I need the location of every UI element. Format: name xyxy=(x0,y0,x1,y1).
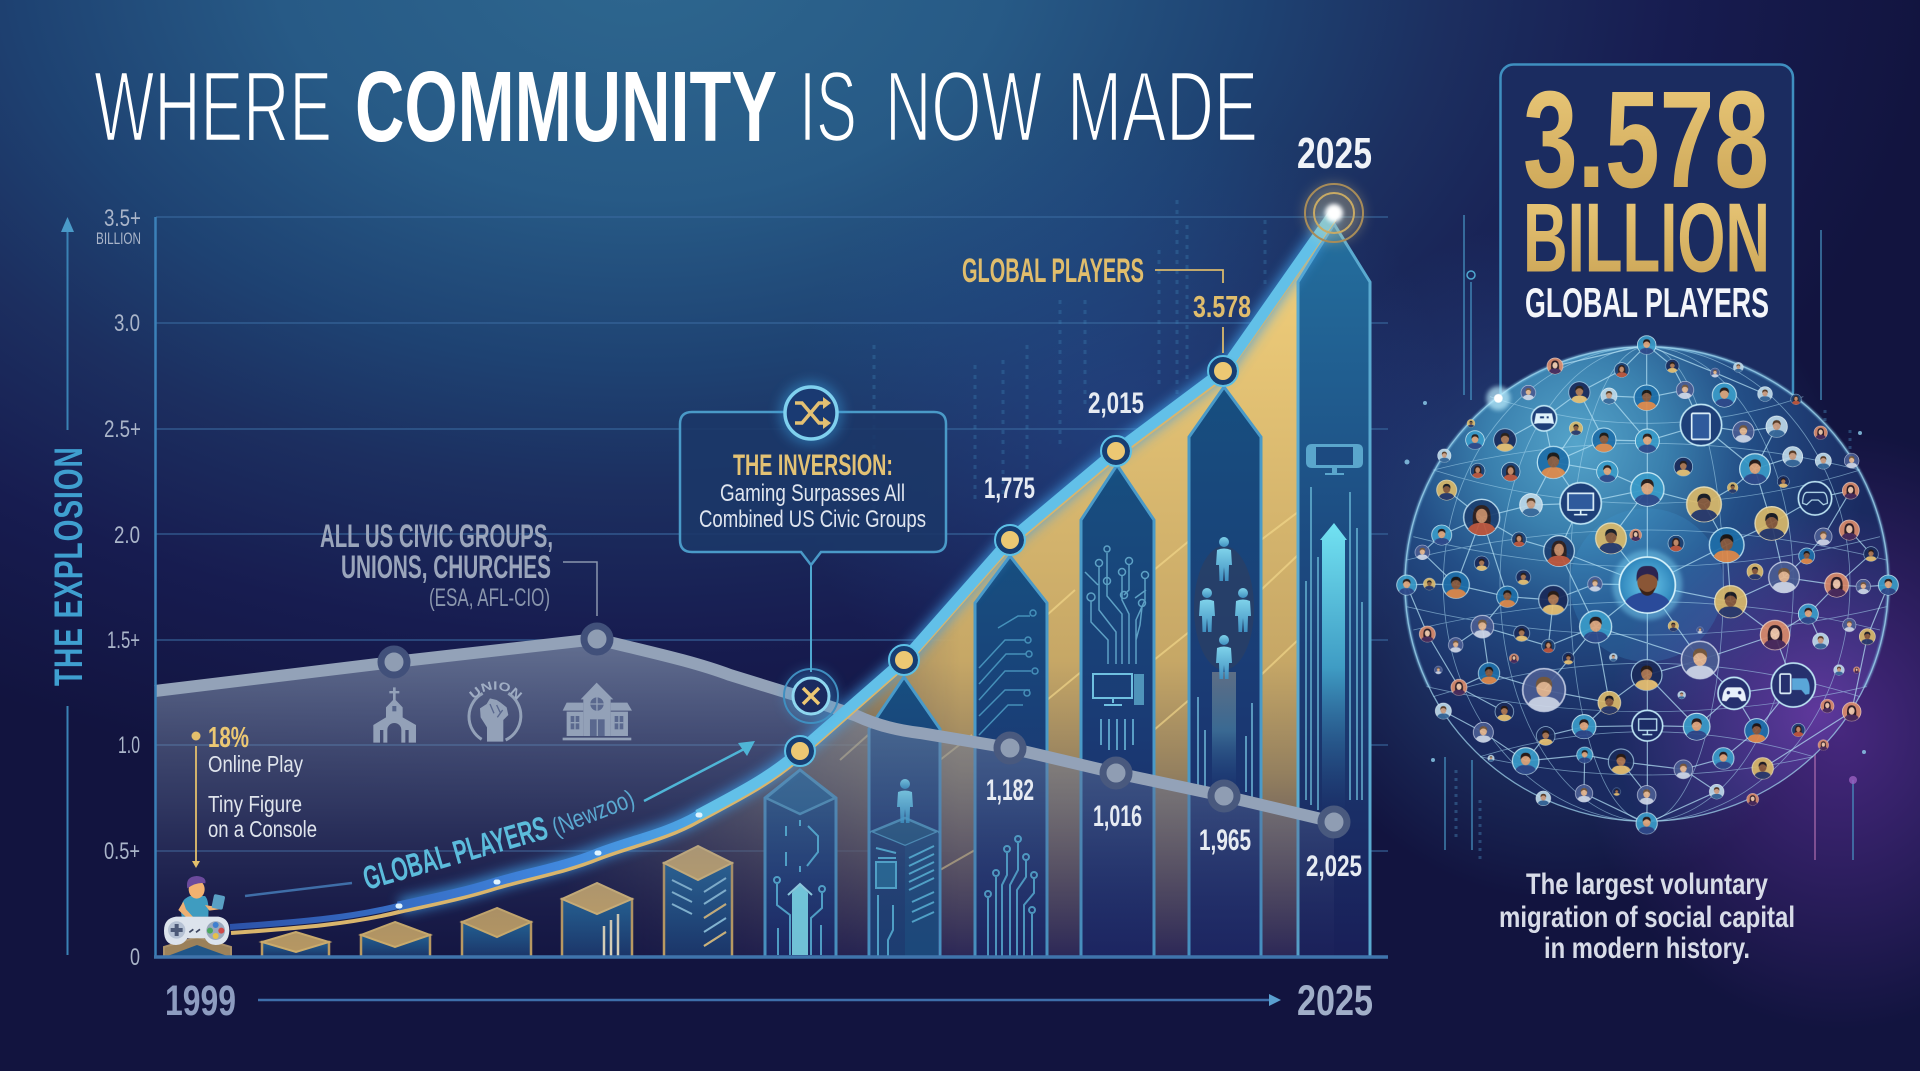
title: WHERE xyxy=(94,51,332,163)
global players gold label: GLOBAL PLAYERS xyxy=(962,252,1144,290)
bar 2017 xyxy=(1081,465,1154,957)
icon: union fist: UNION xyxy=(469,681,522,700)
value labels: 2,015 xyxy=(1088,387,1144,420)
bar 2025 rising arrow xyxy=(1320,523,1347,812)
globe wireframe xyxy=(1407,347,1887,821)
bar 2015 lower circuit xyxy=(985,836,1037,956)
bar 2025 handheld console icon xyxy=(1306,444,1363,475)
callout body: Gaming Surpasses All xyxy=(720,480,905,507)
value labels: 1,182 xyxy=(986,774,1034,807)
icon: tiny figure on a console xyxy=(164,876,229,945)
y axis labels: 3.5+ xyxy=(104,205,141,232)
bar 2003 xyxy=(361,922,430,957)
bar 2001 xyxy=(262,932,329,957)
central glow xyxy=(1612,550,1682,620)
data rain columns xyxy=(874,200,1265,520)
bar 2011 xyxy=(765,770,836,957)
y axis labels: 1.0 xyxy=(118,732,140,759)
y axis labels: 3.0 xyxy=(114,310,140,337)
value labels xyxy=(984,387,1362,883)
callout: the inversion xyxy=(680,381,946,672)
global players gold label: 3.578 xyxy=(1193,289,1251,324)
bar chart: growth columns xyxy=(164,224,1370,957)
online play note xyxy=(192,722,317,868)
icon: church xyxy=(373,687,416,743)
civic groups shaded area xyxy=(155,639,1334,957)
value labels: 1,965 xyxy=(1199,824,1251,857)
bar 2017 circuit xyxy=(1085,546,1148,664)
civic groups label: (ESA, AFL-CIO) xyxy=(429,584,550,612)
title: NOW xyxy=(885,51,1042,163)
closing statement xyxy=(1499,868,1795,965)
bar 2015 xyxy=(975,556,1047,957)
glint xyxy=(1486,386,1510,410)
callout body xyxy=(699,480,926,533)
online play note: Online Play xyxy=(208,751,303,777)
column illustrations xyxy=(774,444,1363,957)
bar 2020 xyxy=(1189,387,1261,957)
closing statement: migration of social capital xyxy=(1499,901,1795,934)
icon: gamepad badge xyxy=(1531,406,1557,431)
global players curve glow xyxy=(400,213,1334,906)
icon: monitor large xyxy=(1560,483,1601,524)
bar 2020 rising lines xyxy=(1198,697,1252,797)
bar 2025 light lines xyxy=(1306,487,1362,810)
bar 2013 person and tower xyxy=(876,779,934,957)
icon: phone and controller xyxy=(1771,663,1815,707)
global players line nodes xyxy=(788,360,1234,762)
value labels: 1,775 xyxy=(984,472,1035,505)
global players curve label: GLOBAL PLAYERS xyxy=(359,809,552,897)
gold area under global players curve xyxy=(618,242,1321,956)
icon: monitor small xyxy=(1632,710,1663,741)
icon: gamepad xyxy=(1718,677,1750,709)
y axis labels: 2.5+ xyxy=(104,416,141,443)
bar 1999 xyxy=(164,937,231,957)
icon: union fist xyxy=(468,681,522,742)
value labels: 1,016 xyxy=(1093,800,1142,833)
panel: headline statistic: GLOBAL PLAYERS xyxy=(1525,279,1769,326)
panel: headline statistic: BILLION xyxy=(1523,182,1770,292)
online play note: 18% xyxy=(208,722,249,754)
icon: shuffle arrows xyxy=(779,381,843,445)
closing statement: The largest voluntary xyxy=(1526,868,1768,901)
civic groups label xyxy=(320,518,597,616)
x axis timeline: 2025 xyxy=(1297,977,1373,1025)
gridlines xyxy=(156,217,1388,851)
y axis title: the explosion xyxy=(47,217,91,955)
device icons xyxy=(1531,404,1832,741)
2025 peak burst xyxy=(1304,183,1364,243)
network links xyxy=(1407,345,1888,823)
inversion crossing marker xyxy=(784,669,838,723)
x axis timeline: 1999 xyxy=(165,977,236,1025)
icon: controller outline xyxy=(1798,482,1832,515)
y axis labels: BILLION xyxy=(96,230,141,248)
civic line nodes xyxy=(381,626,1347,835)
closing statement: in modern history. xyxy=(1544,932,1750,965)
value labels: 2,025 xyxy=(1306,850,1362,883)
bar 2020 people network xyxy=(1194,537,1254,790)
icon: tablet xyxy=(1680,404,1722,446)
title: COMMUNITY xyxy=(355,51,777,163)
gold circuit traces xyxy=(840,420,1298,870)
side light lines xyxy=(1445,215,1853,860)
y axis labels xyxy=(96,205,141,971)
bar 2005 xyxy=(462,908,531,957)
y axis title: the explosion: THE EXPLOSION xyxy=(47,447,91,686)
y axis labels: 0.5+ xyxy=(104,838,140,865)
civic groups label: UNIONS, CHURCHES xyxy=(341,549,551,585)
global players curve label: (Newzoo) xyxy=(548,785,638,842)
civic groups label: ALL US CIVIC GROUPS, xyxy=(320,518,553,554)
network globe xyxy=(1397,336,1898,834)
bar 2013 xyxy=(869,677,940,957)
bar 2007 xyxy=(562,883,632,957)
online play note: Tiny Figure xyxy=(208,791,302,817)
bar 2025 xyxy=(1298,224,1370,957)
civic icons xyxy=(373,681,632,743)
global players gold label xyxy=(962,252,1251,353)
title: MADE xyxy=(1067,51,1258,163)
callout body: Combined US Civic Groups xyxy=(699,506,926,533)
featured central member xyxy=(1619,557,1675,613)
icon: community hall xyxy=(563,683,632,740)
panel: headline statistic: 3.578 xyxy=(1523,63,1769,217)
callout heading: THE INVERSION: xyxy=(733,449,893,482)
background glows xyxy=(790,100,1920,1030)
civic groups line xyxy=(155,639,1334,822)
y axis labels: 1.5+ xyxy=(107,627,140,654)
global players line xyxy=(230,213,1335,933)
member avatars xyxy=(1397,336,1898,834)
y axis labels: 2.0 xyxy=(114,522,140,549)
panel: headline statistic xyxy=(1500,63,1793,404)
bar 2009 xyxy=(664,846,732,957)
axes xyxy=(154,217,1388,957)
2025 peak label: 2025 xyxy=(1297,129,1372,178)
global players curve label xyxy=(245,741,755,897)
bar 2017 computer icon xyxy=(1093,674,1144,750)
x axis timeline xyxy=(165,977,1373,1025)
bar 2011 circuit and arrow xyxy=(774,820,825,955)
y axis labels: 0 xyxy=(130,944,140,971)
online play note: on a Console xyxy=(208,816,317,842)
title xyxy=(94,51,1258,163)
globe body xyxy=(1405,347,1888,821)
title: IS xyxy=(799,51,857,163)
bar 2015 upper circuit xyxy=(979,610,1038,735)
